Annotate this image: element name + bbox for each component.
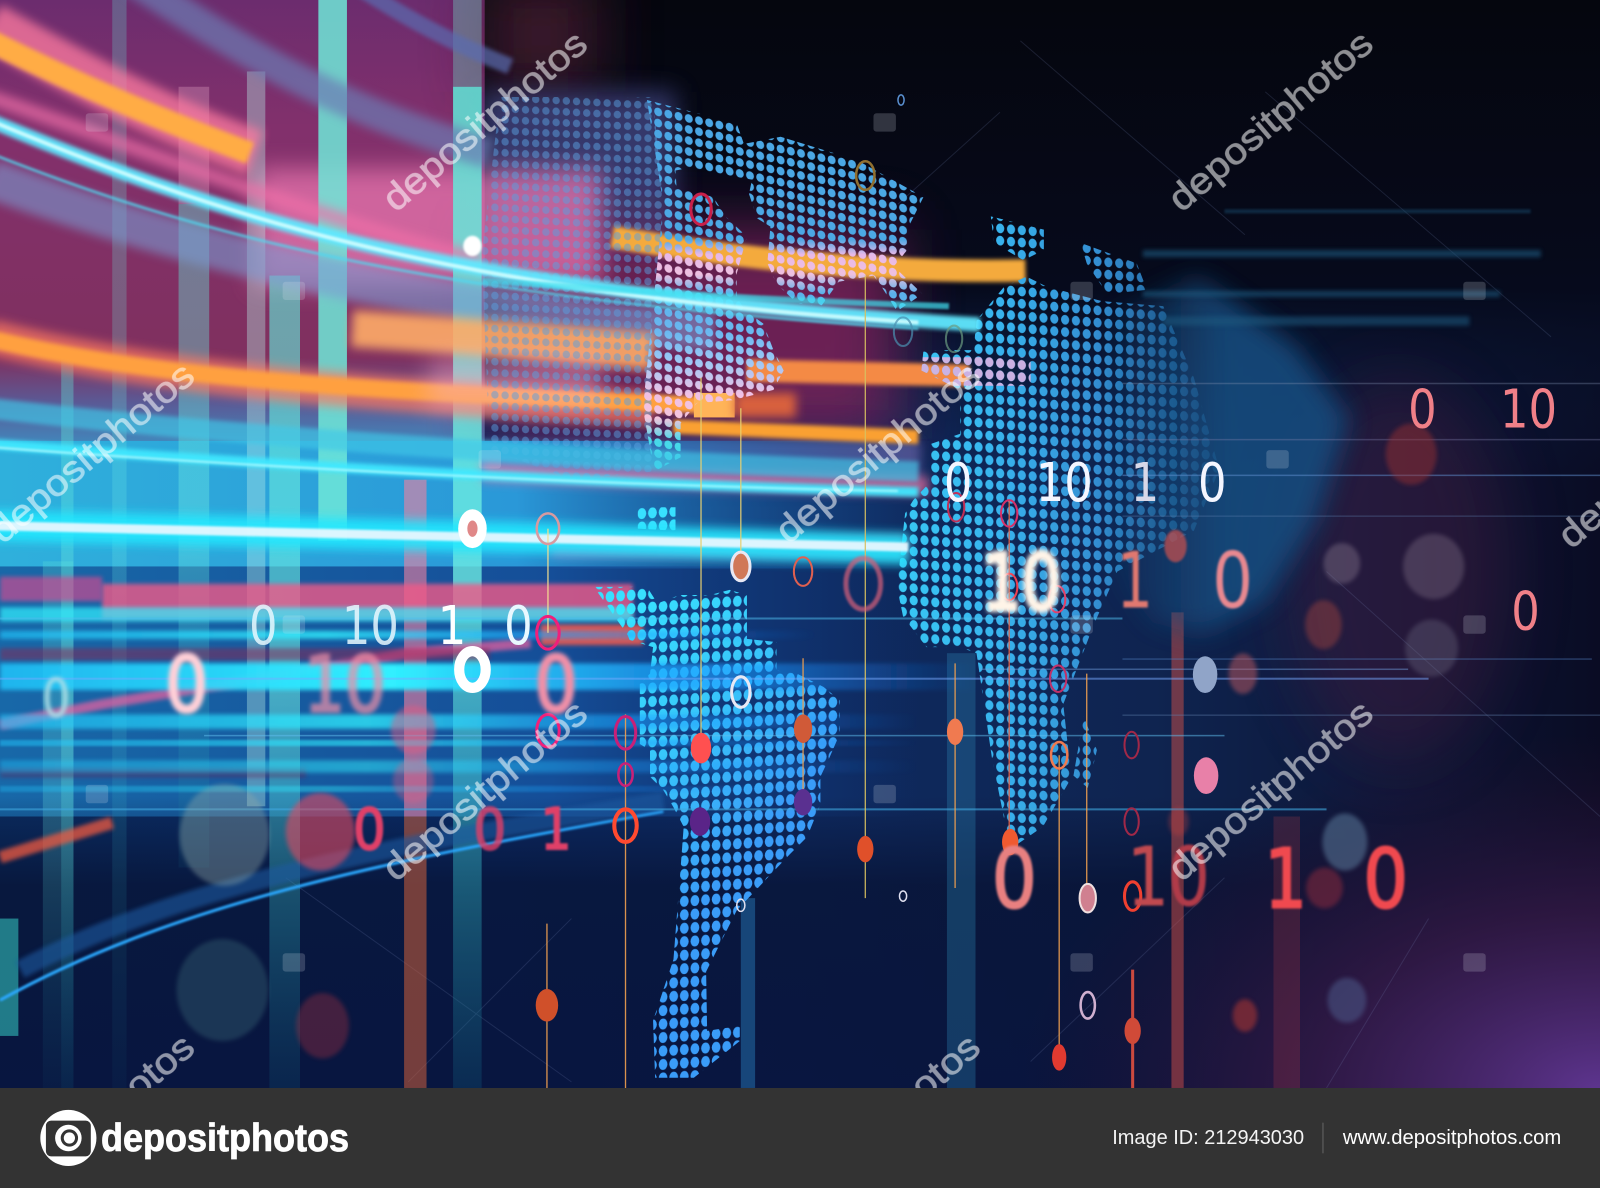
dotted world map <box>482 92 1235 1092</box>
left cyan wash <box>0 441 939 568</box>
digits lower left <box>353 797 571 863</box>
orange streak across north map <box>612 237 1026 271</box>
binary digits <box>42 379 1557 927</box>
digits row lower map <box>982 536 1253 628</box>
digits row lower map: 1 <box>1116 536 1153 626</box>
orange lower <box>673 427 918 437</box>
image id: Image ID: 212943030 <box>1112 1127 1304 1149</box>
broad muted arcs <box>0 0 714 332</box>
soft red right <box>1286 378 1510 765</box>
diagonal faint lines <box>286 41 1600 1088</box>
diagonal watermark text: depositphotos <box>1160 23 1381 219</box>
footer bar <box>0 1088 1600 1188</box>
digits lower left: 0 <box>473 797 506 863</box>
digits left row <box>249 595 533 657</box>
digits bottom right <box>992 830 1408 927</box>
diagonal watermark text: depositphotos <box>374 23 595 219</box>
vertical data lines <box>547 276 1133 1088</box>
purple haze behind faded map <box>482 92 676 265</box>
digits blurred left row: 0 <box>535 640 578 730</box>
small camera watermarks <box>86 113 1486 972</box>
digits top right: 10 <box>1500 379 1557 441</box>
digits row upper map: 0 <box>1198 452 1227 514</box>
purple under streaks <box>482 441 920 482</box>
digits row upper map: 0 <box>944 452 972 514</box>
digits blurred left row: 0 <box>165 640 208 730</box>
map: South and Central America <box>596 507 840 1078</box>
diagonal watermark text: depositphotos <box>1160 692 1381 889</box>
dark top area <box>482 0 1600 480</box>
digits left row: 0 <box>249 595 278 657</box>
diagonal watermark text: depositphotos <box>374 692 595 889</box>
brown glow top <box>485 0 597 92</box>
digits top right: 0 <box>1408 379 1437 441</box>
digits row lower map: 10 <box>982 538 1061 628</box>
purple glow bottom right <box>1020 735 1600 1092</box>
digits blurred left row: 10 <box>304 640 386 730</box>
digits bottom right: 0 <box>1363 832 1408 927</box>
pink wash over centre <box>429 357 602 408</box>
digits top right: 0 <box>1511 581 1540 643</box>
digits left row: 10 <box>342 595 399 657</box>
horizontal cyan bands <box>0 209 1600 810</box>
website url: www.depositphotos.com <box>1342 1127 1561 1149</box>
cool light streaks <box>0 120 980 1000</box>
map: North America faded <box>482 92 665 490</box>
digits left row: 0 <box>504 595 533 657</box>
maroon behind orange streaks <box>490 230 898 439</box>
icon: depositphotos camera logo <box>40 1110 96 1166</box>
warm light streaks <box>0 26 1026 857</box>
pink glow <box>255 168 602 286</box>
orange streak lower left <box>0 337 653 408</box>
digits row upper map <box>944 452 1227 514</box>
map: North America and Greenland <box>643 92 939 480</box>
digits top right <box>1408 379 1557 643</box>
digits bottom right: 1 <box>1264 832 1307 927</box>
pink bands <box>102 584 633 618</box>
bokeh circles <box>177 424 1464 1058</box>
digits bottom right: 0 <box>1167 830 1210 925</box>
map: pink tint across Europe <box>918 357 1031 386</box>
digits row upper map: 10 <box>1036 452 1093 514</box>
digits bottom right: 1 <box>1127 830 1169 925</box>
maroon upper left <box>0 0 485 449</box>
digits lower left: 1 <box>541 797 571 863</box>
digits lower left: 0 <box>353 797 386 863</box>
digits row lower map: 0 <box>1212 536 1253 626</box>
diagonal watermark text: depositphotos <box>767 354 988 551</box>
map: Africa, Europe and Asia <box>898 216 1218 844</box>
digits row upper map: 1 <box>1131 452 1159 514</box>
orange streak centre left <box>352 329 653 352</box>
data point circles <box>458 95 1218 1071</box>
left blue wash <box>0 566 918 816</box>
orange mid <box>747 370 969 376</box>
vertical light bars <box>0 0 1300 1088</box>
logo wordmark: depositphotos <box>101 1117 349 1160</box>
dark bottom area <box>0 796 1600 1092</box>
digits bottom right: 0 <box>992 832 1037 927</box>
digits blurred left row: 0 <box>42 667 70 729</box>
digits blurred left row <box>42 640 578 730</box>
orange streak top left <box>0 26 255 153</box>
dim Asia blur <box>1112 278 1349 633</box>
digits left row: 1 <box>438 595 466 657</box>
